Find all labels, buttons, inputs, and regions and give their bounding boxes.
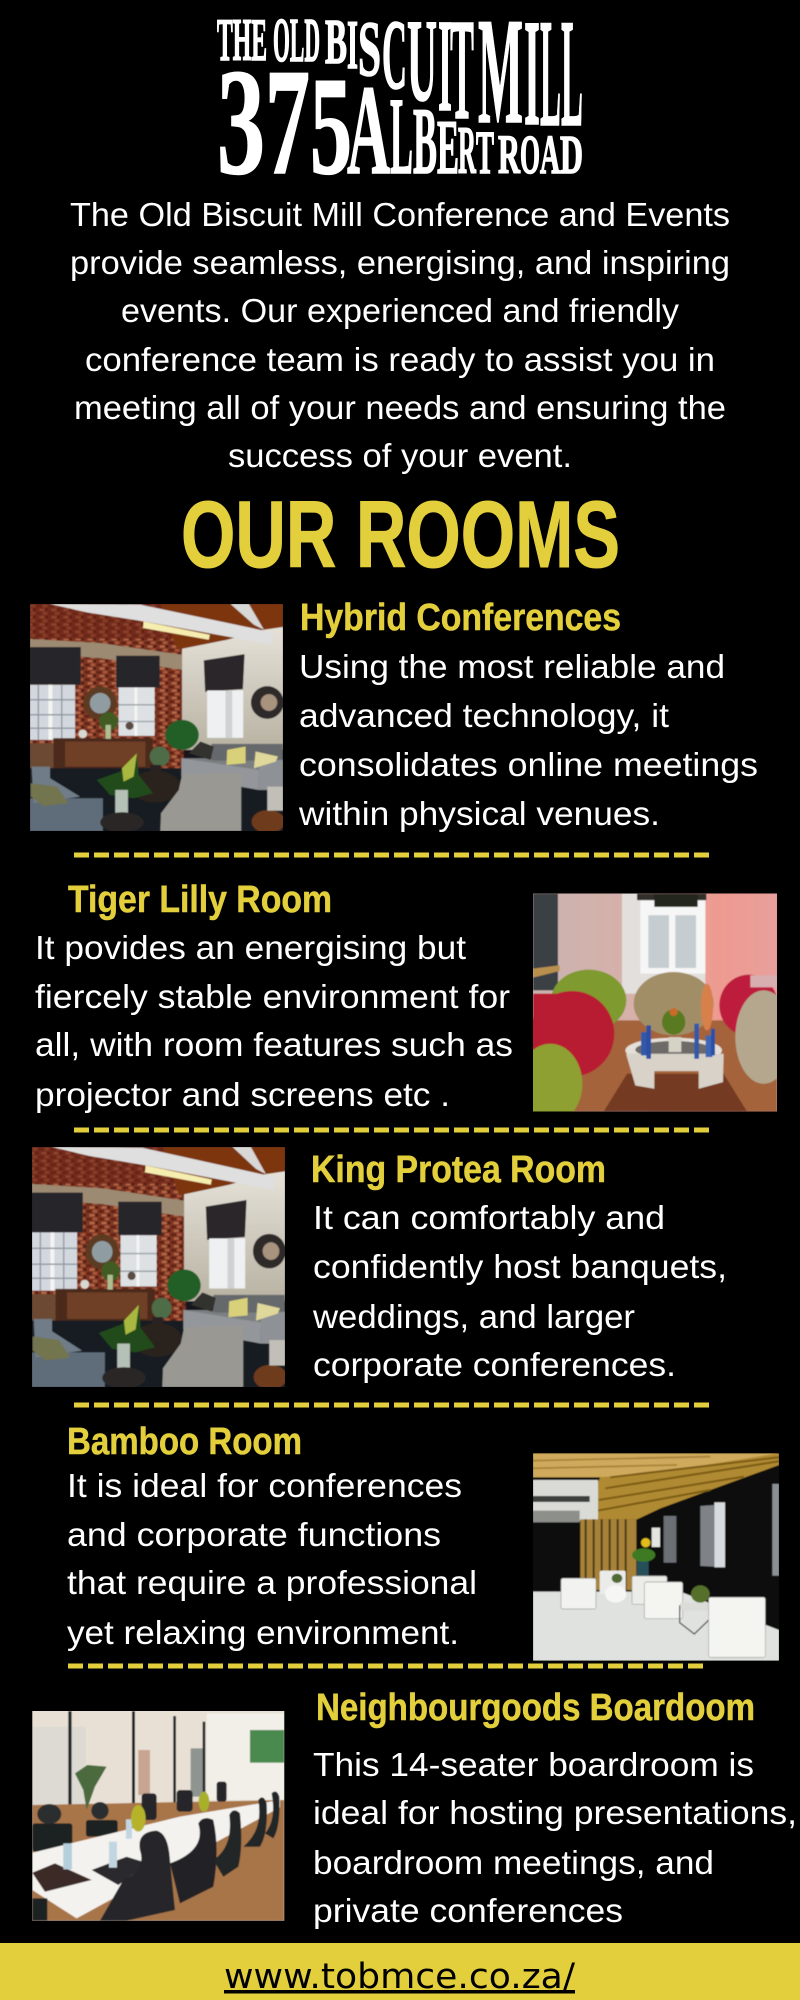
logo: The Old Biscuit Mill, 375 Albert Road: O <box>520 124 540 185</box>
logo: The Old Biscuit Mill, 375 Albert Road <box>217 0 583 206</box>
photo: lounge room <box>30 604 283 831</box>
photo: beanbag room <box>533 894 777 1112</box>
heading: Tiger Lilly Room: Tiger Lilly Room <box>68 879 332 921</box>
footer bar with website <box>0 1943 800 2000</box>
panel: Bamboo Room <box>67 1421 780 1663</box>
panel: Neighbourgoods Boardoom <box>30 1687 797 1929</box>
description: Neighbourgoods Boardoom <box>313 1746 797 1929</box>
description: King Protea Room: It can comfortably and <box>313 1199 665 1236</box>
description: Bamboo Room: that require a professional <box>67 1564 477 1601</box>
description: Bamboo Room: yet relaxing environment. <box>67 1614 459 1651</box>
description: King Protea Room: corporate conferences. <box>313 1346 676 1383</box>
description: Tiger Lilly Room: fiercely stable environment for <box>35 978 510 1015</box>
photo: boardroom <box>32 1711 284 1921</box>
intro text: conference team is ready to assist you in <box>85 341 715 378</box>
description: Tiger Lilly Room: It povides an energising but <box>35 929 466 966</box>
intro text: provide seamless, energising, and inspiring <box>70 244 730 281</box>
intro text: meeting all of your needs and ensuring the <box>74 389 726 426</box>
description: King Protea Room: weddings, and larger <box>312 1298 635 1335</box>
description: Hybrid Conferences: advanced technology, it <box>299 697 669 734</box>
description: Bamboo Room: It is ideal for conferences <box>67 1467 462 1504</box>
logo: The Old Biscuit Mill, 375 Albert Road: B <box>325 7 347 77</box>
description: King Protea Room: confidently host banquets, <box>313 1248 727 1285</box>
footer bar with website: www.tobmce.co.za/ <box>224 1957 575 1997</box>
logo: The Old Biscuit Mill, 375 Albert Road: E <box>437 104 459 190</box>
logo: The Old Biscuit Mill, 375 Albert Road: I <box>347 7 358 84</box>
description: Hybrid Conferences: within physical venues. <box>298 795 660 832</box>
description: King Protea Room <box>312 1199 727 1383</box>
logo: The Old Biscuit Mill, 375 Albert Road: R <box>458 112 476 188</box>
description: Neighbourgoods Boardoom: This 14-seater boardroom is <box>313 1746 754 1783</box>
intro text <box>70 196 730 474</box>
description: Hybrid Conferences: Using the most reliable and <box>299 648 725 685</box>
description: Tiger Lilly Room <box>35 929 513 1113</box>
logo: The Old Biscuit Mill, 375 Albert Road: A <box>347 59 390 201</box>
description: Bamboo Room: and corporate functions <box>67 1516 441 1553</box>
photo: lounge room <box>32 1147 285 1387</box>
logo: The Old Biscuit Mill, 375 Albert Road: S <box>358 5 381 92</box>
logo: The Old Biscuit Mill, 375 Albert Road: 5 <box>310 49 352 204</box>
logo: The Old Biscuit Mill, 375 Albert Road: 3 <box>217 38 265 206</box>
heading: Our Rooms: OUR ROOMS <box>181 482 620 588</box>
panel: King Protea Room <box>29 1142 727 1389</box>
logo: The Old Biscuit Mill, 375 Albert Road: C <box>382 0 407 110</box>
panel: Tiger Lilly Room <box>35 879 792 1124</box>
logo: The Old Biscuit Mill, 375 Albert Road: L <box>390 75 413 197</box>
description: Tiger Lilly Room: all, with room features such as <box>35 1026 513 1063</box>
logo: The Old Biscuit Mill, 375 Albert Road: A <box>540 124 560 185</box>
heading: Bamboo Room: Bamboo Room <box>67 1421 302 1463</box>
intro text: success of your event. <box>228 437 572 474</box>
description: Tiger Lilly Room: projector and screens etc . <box>35 1076 450 1113</box>
description: Neighbourgoods Boardoom: ideal for hosting presentations, <box>313 1794 797 1831</box>
logo: The Old Biscuit Mill, 375 Albert Road: 7 <box>265 38 310 206</box>
heading: King Protea Room: King Protea Room <box>311 1149 606 1191</box>
logo: The Old Biscuit Mill, 375 Albert Road: THE <box>217 7 267 73</box>
description: Hybrid Conferences: consolidates online meetings <box>299 746 758 783</box>
heading: Hybrid Conferences: Hybrid Conferences <box>300 597 621 639</box>
logo: The Old Biscuit Mill, 375 Albert Road: B <box>413 88 437 194</box>
logo: The Old Biscuit Mill, 375 Albert Road: D <box>560 124 583 185</box>
description: Neighbourgoods Boardoom: boardroom meetings, and <box>313 1844 714 1881</box>
description: Neighbourgoods Boardoom: private conferences <box>313 1892 623 1929</box>
intro text: The Old Biscuit Mill Conference and Events <box>70 196 730 233</box>
logo: The Old Biscuit Mill, 375 Albert Road: T <box>476 120 494 187</box>
description: Bamboo Room <box>67 1467 477 1651</box>
description: Hybrid Conferences <box>298 648 758 832</box>
photo: bamboo lounge <box>533 1453 779 1661</box>
logo: The Old Biscuit Mill, 375 Albert Road: OLD <box>273 7 320 75</box>
logo: The Old Biscuit Mill, 375 Albert Road: R <box>498 124 521 185</box>
panel: Hybrid Conferences <box>27 597 758 833</box>
intro text: events. Our experienced and friendly <box>121 292 680 329</box>
